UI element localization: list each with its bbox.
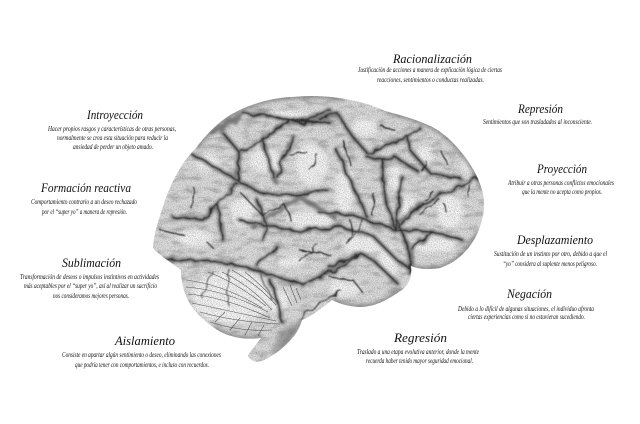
brain shading and folds [150, 95, 486, 365]
text block [31, 197, 137, 216]
wide soft fold shadows [153, 110, 480, 323]
text block: por el “super yo” a manera de represión. [41, 207, 127, 216]
panel: Introyección [47, 107, 176, 151]
text block: más aceptables por el “super yo”, así al realizar un sacrificio [24, 281, 157, 290]
text block: Justificación de acciones a manera de explicación lógica de ciertas [358, 65, 502, 74]
heading: Negación [506, 286, 552, 301]
panel: Negación [457, 286, 594, 321]
text block: “yo” considera al suplente menos peligroso. [503, 259, 597, 268]
brain silhouette [153, 96, 484, 362]
panel: Sublimación [20, 255, 159, 300]
panel: Regresión [357, 330, 479, 365]
text block: Traslado a una etapa evolutiva anterior, donde la mente [357, 347, 479, 356]
text block: recuerda haber tenido mayor seguridad emocional. [366, 356, 473, 365]
text block: Hacer propios rasgos y características de otras personas, [47, 124, 176, 133]
panel: Desplazamiento [494, 232, 607, 268]
pencil grain [150, 95, 486, 365]
panel: Formación reactiva [31, 180, 137, 216]
fine dark fold lines [153, 110, 480, 323]
text block: ansiedad de perder un objeto amado. [73, 142, 153, 151]
heading: Regresión [393, 330, 447, 345]
text block: reacciones, sentimientos o conductas realizadas. [377, 75, 484, 84]
text block: que podría tener con comportamientos, e incluso con recuerdos. [75, 360, 209, 369]
text block [494, 249, 607, 268]
panel: Proyección [507, 161, 614, 196]
text block: Transformación de deseos o impulsos instintivos en actividades [20, 272, 159, 281]
cerebellum branches [202, 268, 272, 305]
heading: Aislamiento [114, 333, 175, 348]
heading: Represión [517, 101, 563, 116]
text block [507, 178, 614, 196]
text block: nos consideramos mejores personas. [53, 291, 129, 300]
text block: que la mente no acepta como propios. [522, 187, 602, 196]
brainstem shading [270, 322, 296, 356]
heading: Desplazamiento [516, 232, 593, 247]
mottled pencil shading [150, 95, 486, 365]
text block [357, 347, 479, 365]
text block [20, 272, 159, 300]
cerebellum ribs [186, 270, 301, 336]
icon: brain illustration [150, 95, 486, 365]
text block [47, 124, 176, 151]
text block: Consiste en apartar algún sentimiento o deseo, eliminando las conexiones [62, 350, 221, 359]
heading: Proyección [536, 161, 587, 176]
heading: Racionalización [392, 51, 472, 66]
text block: ciertas experiencias como si no estuvieran sucediendo. [468, 312, 585, 321]
text block: normalmente se crea esta situación para reducir la [57, 133, 168, 142]
text block: Sentimientos que son trasladados al inconsciente. [483, 117, 592, 126]
rim shading [196, 96, 482, 350]
text block [358, 65, 502, 84]
text block [62, 350, 221, 369]
panel: Aislamiento [62, 333, 221, 369]
panel: Represión [483, 101, 592, 126]
gyri highlights [177, 110, 474, 324]
panel: Racionalización [358, 51, 502, 84]
text block [457, 304, 594, 321]
heading: Introyección [86, 107, 143, 122]
text block: Comportamiento contrario a un deseo rechazado [31, 197, 137, 206]
heading: Sublimación [62, 255, 121, 270]
heading: Formación reactiva [40, 180, 131, 195]
